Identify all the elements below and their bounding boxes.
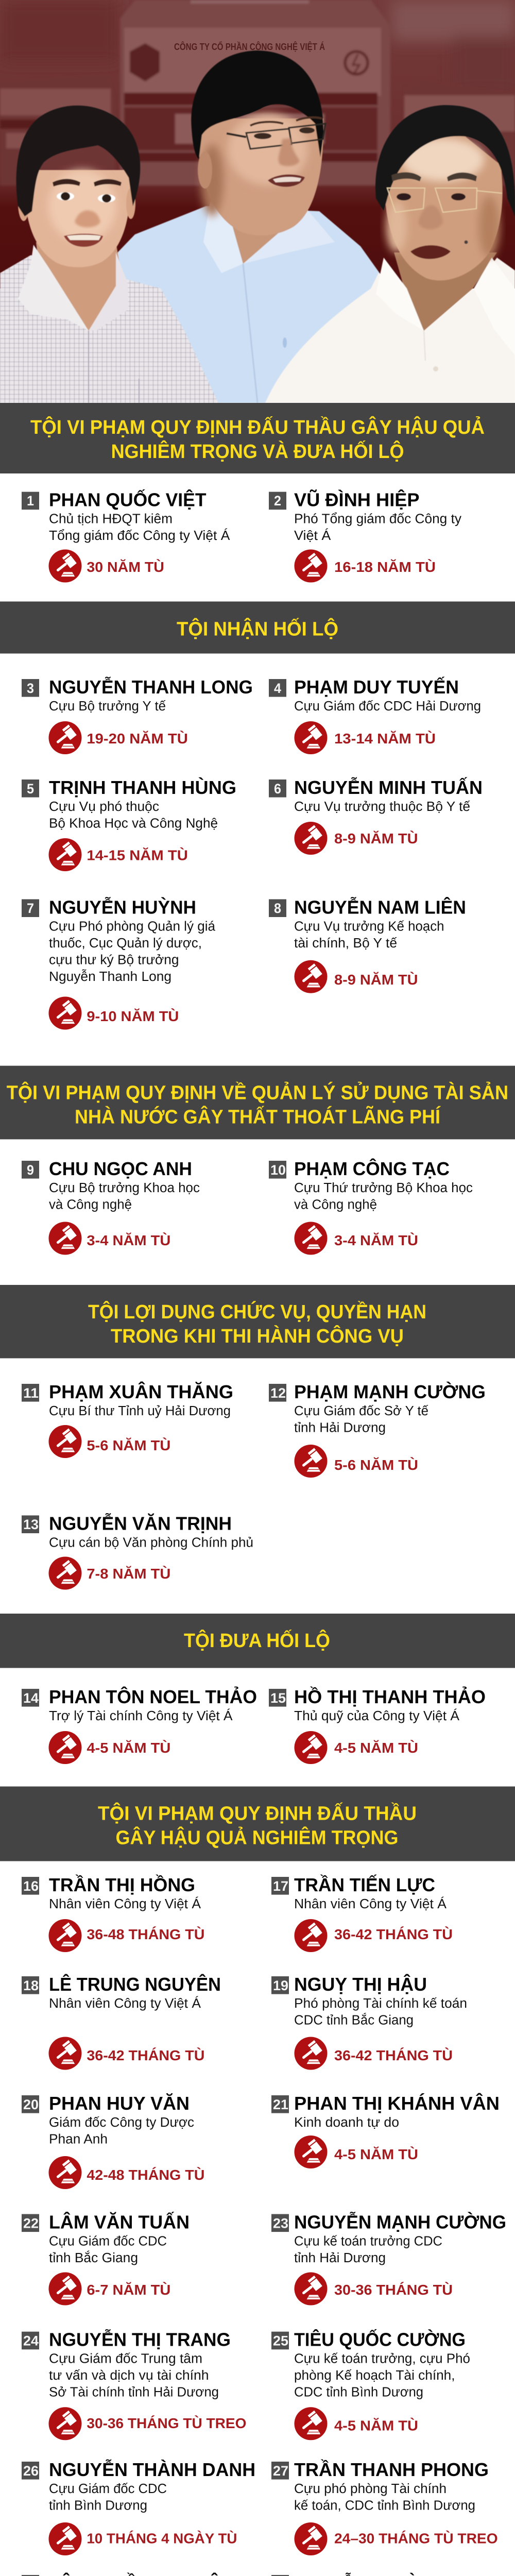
person 4: PHẠM DUY TUYẾN: [294, 676, 459, 698]
person 8: [269, 896, 466, 993]
person 23: 23: [273, 2215, 288, 2231]
person 22: Cựu Giám đốc CDC: [49, 2234, 167, 2248]
person 17: TRẦN TIẾN LỰC: [294, 1874, 435, 1895]
person 10: và Công nghệ: [294, 1197, 377, 1212]
person 8: 8-9 NĂM TÙ: [334, 972, 418, 988]
person 15: 4-5 NĂM TÙ: [334, 1740, 418, 1756]
person 21: Kinh doanh tự do: [294, 2115, 399, 2130]
person 6: NGUYỄN MINH TUẤN: [294, 776, 483, 798]
person 27: 27: [273, 2463, 288, 2479]
person 13: [22, 1512, 253, 1590]
person 20: 20: [23, 2097, 39, 2112]
person 5: [22, 776, 236, 871]
person 19: [271, 1973, 467, 2070]
person 4: 4: [274, 681, 281, 696]
person 10: 3-4 NĂM TÙ: [334, 1232, 418, 1248]
person 15: Thủ quỹ của Công ty Việt Á: [294, 1708, 459, 1723]
person 14: 4-5 NĂM TÙ: [87, 1740, 170, 1756]
band: bid violation and bribery heading: TỘI VI PHẠM QUY ĐỊNH ĐẤU THẦU GÂY HẬU QUẢ: [30, 415, 485, 438]
person 19: 19: [273, 1978, 288, 1993]
band: bid violation serious consequences heading: [0, 1787, 515, 1861]
person 19: 36-42 THÁNG TÙ: [334, 2047, 453, 2063]
person 27: [271, 2459, 498, 2555]
person 20: Phan Anh: [49, 2132, 108, 2146]
person 22: LÂM VĂN TUẤN: [49, 2211, 190, 2233]
person 15: [269, 1686, 486, 1764]
person 20: [22, 2093, 204, 2189]
person 14: 14: [23, 1690, 39, 1706]
band: abuse of position heading: TỘI LỢI DỤNG CHỨC VỤ, QUYỀN HẠN: [88, 1300, 426, 1323]
person 5: Bộ Khoa Học và Công Nghệ: [49, 816, 218, 831]
person 8: 8: [274, 901, 281, 916]
person 4: [269, 676, 481, 754]
person 16: Nhân viên Công ty Việt Á: [49, 1896, 201, 1911]
person 21: 4-5 NĂM TÙ: [334, 2146, 418, 2162]
person 14: PHAN TÔN NOEL THẢO: [49, 1686, 257, 1707]
header photo: three defendants over Viet A test kit boxes: [0, 0, 515, 403]
person 11: 5-6 NĂM TÙ: [87, 1437, 170, 1453]
person 6: Cựu Vụ trưởng thuộc Bộ Y tế: [294, 800, 470, 814]
person 18: 36-42 THÁNG TÙ: [87, 2047, 204, 2063]
person 18: Nhân viên Công ty Việt Á: [49, 1996, 201, 2011]
band: bid violation and bribery heading: NGHIÊM TRỌNG VÀ ĐƯA HỐI LỘ: [111, 439, 404, 463]
person 13: NGUYỄN VĂN TRỊNH: [49, 1512, 232, 1534]
person 25: Cựu kế toán trưởng, cựu Phó: [294, 2352, 470, 2366]
person 27: Cựu phó phòng Tài chính: [294, 2482, 447, 2496]
person 7: NGUYỄN HUỲNH: [49, 896, 196, 918]
person 5: 5: [27, 781, 34, 796]
person 18: LÊ TRUNG NGUYÊN: [49, 1973, 221, 1995]
person 11: Cựu Bí thư Tỉnh uỷ Hải Dương: [49, 1404, 231, 1418]
person 15: 15: [270, 1690, 286, 1706]
person 1: 1: [27, 493, 34, 509]
person 27: 24–30 THÁNG TÙ TREO: [334, 2531, 498, 2546]
person 17: 36-42 THÁNG TÙ: [334, 1926, 453, 1942]
box label text: CÔNG TY CỔ PHẦN CÔNG NGHỆ VIỆT Á: [174, 41, 325, 52]
person 26: 10 THÁNG 4 NGÀY TÙ: [87, 2531, 237, 2546]
person 10: Cựu Thứ trưởng Bộ Khoa học: [294, 1181, 473, 1195]
person 3: Cựu Bộ trưởng Y tế: [49, 699, 166, 714]
person 7: 7: [27, 901, 34, 916]
person 26: tỉnh Bình Dương: [49, 2499, 147, 2513]
person 24: NGUYỄN THỊ TRANG: [49, 2329, 231, 2350]
person 3: [22, 676, 253, 754]
person 13: Cựu cán bộ Văn phòng Chính phủ: [49, 1535, 253, 1550]
band: bid violation and bribery heading: [0, 403, 515, 473]
person 12: Cựu Giám đốc Sở Y tế: [294, 1404, 428, 1418]
person: centre, light blue shirt: [110, 50, 392, 403]
person 4: Cựu Giám đốc CDC Hải Dương: [294, 699, 481, 714]
person 12: [269, 1381, 486, 1478]
person 1: Chủ tịch HĐQT kiêm: [49, 512, 173, 527]
person 8: NGUYỄN NAM LIÊN: [294, 896, 466, 918]
person 24: 24: [23, 2333, 39, 2349]
band: state asset management heading: [0, 1066, 515, 1139]
person 18: 18: [23, 1978, 39, 1993]
person 10: PHẠM CÔNG TẠC: [294, 1158, 450, 1179]
band: abuse of position heading: [0, 1285, 515, 1358]
person 16: 36-48 THÁNG TÙ: [87, 1926, 204, 1942]
person 7: thuốc, Cục Quản lý dược,: [49, 936, 202, 951]
person 21: 21: [273, 2097, 288, 2112]
person 20: 42-48 THÁNG TÙ: [87, 2167, 204, 2183]
person 1: Tổng giám đốc Công ty Việt Á: [49, 528, 230, 543]
person 23: 30-36 THÁNG TÙ: [334, 2282, 453, 2298]
person 6: 8-9 NĂM TÙ: [334, 831, 418, 846]
person 2: Việt Á: [294, 528, 331, 543]
person 16: 16: [23, 1878, 39, 1894]
person 19: Phó phòng Tài chính kế toán: [294, 1996, 467, 2011]
person 12: PHẠM MẠNH CƯỜNG: [294, 1381, 486, 1402]
person 7: Nguyễn Thanh Long: [49, 969, 171, 984]
person 17: 17: [273, 1878, 288, 1894]
person 20: PHAN HUY VĂN: [49, 2093, 190, 2114]
person 7: 9-10 NĂM TÙ: [87, 1008, 179, 1024]
person 25: phòng Kế hoạch Tài chính,: [294, 2368, 455, 2383]
person 26: [22, 2459, 255, 2555]
person 25: [271, 2329, 470, 2440]
person 9: 9: [27, 1162, 34, 1178]
person 23: tỉnh Hải Dương: [294, 2251, 386, 2265]
person 2: 16-18 NĂM TÙ: [334, 559, 436, 575]
person 13: 7-8 NĂM TÙ: [87, 1566, 170, 1582]
person 25: CDC tỉnh Bình Dương: [294, 2385, 423, 2400]
person 5: Cựu Vụ phó thuộc: [49, 800, 159, 814]
person 27: TRẦN THANH PHONG: [294, 2459, 489, 2480]
person 23: [271, 2211, 506, 2306]
person 5: TRỊNH THANH HÙNG: [49, 776, 236, 798]
band: bribe taking heading: TỘI NHẬN HỐI LỘ: [177, 617, 338, 640]
person 17: [271, 1874, 453, 1952]
band: abuse of position heading: TRONG KHI THI HÀNH CÔNG VỤ: [111, 1324, 404, 1347]
person 10: 10: [270, 1162, 286, 1178]
person 3: 3: [27, 681, 34, 696]
person 27: kế toán, CDC tỉnh Bình Dương: [294, 2499, 475, 2513]
person 5: 14-15 NĂM TÙ: [87, 847, 188, 863]
person 12: 5-6 NĂM TÙ: [334, 1457, 418, 1473]
person 3: 19-20 NĂM TÙ: [87, 731, 188, 747]
person 9: CHU NGỌC ANH: [49, 1158, 192, 1179]
person 15: HỒ THỊ THANH THẢO: [294, 1686, 486, 1707]
person 9: 3-4 NĂM TÙ: [87, 1232, 170, 1248]
person 2: [269, 489, 461, 583]
person 26: NGUYỄN THÀNH DANH: [49, 2459, 255, 2480]
person 1: 30 NĂM TÙ: [87, 559, 164, 575]
person 6: [269, 776, 483, 855]
person: left, checked shirt: [0, 106, 218, 403]
person 22: [22, 2211, 190, 2306]
photo background: kit boxes tinted red: [0, 0, 515, 289]
person 26: Cựu Giám đốc CDC: [49, 2482, 167, 2496]
person 23: NGUYỄN MẠNH CƯỜNG: [294, 2211, 506, 2233]
person 22: 22: [23, 2215, 39, 2231]
person 16: [22, 1874, 204, 1952]
person 7: Cựu Phó phòng Quản lý giá: [49, 919, 216, 934]
person 22: 6-7 NĂM TÙ: [87, 2282, 170, 2298]
person 24: [22, 2329, 246, 2440]
band: bribe giving heading: [0, 1614, 515, 1668]
person 8: Cựu Vụ trưởng Kế hoạch: [294, 919, 444, 934]
person 13: 13: [23, 1517, 39, 1532]
person 6: 6: [274, 781, 281, 796]
person 12: 12: [270, 1385, 286, 1401]
person 19: NGUỴ THỊ HẬU: [294, 1973, 427, 1995]
person 24: Cựu Giám đốc Trung tâm: [49, 2352, 202, 2366]
band: bid violation serious consequences heading: TỘI VI PHẠM QUY ĐỊNH ĐẤU THẦU: [98, 1801, 417, 1825]
person 12: tỉnh Hải Dương: [294, 1421, 386, 1435]
person 10: [269, 1158, 473, 1255]
person 11: 11: [23, 1385, 39, 1401]
person 23: Cựu kế toán trưởng CDC: [294, 2234, 442, 2248]
person 9: Cựu Bộ trưởng Khoa học: [49, 1181, 200, 1195]
person 2: 2: [274, 493, 281, 509]
person 2: VŨ ĐÌNH HIỆP: [294, 489, 420, 511]
person 1: [22, 489, 230, 583]
person 24: 30-36 THÁNG TÙ TREO: [87, 2415, 246, 2431]
person 11: PHẠM XUÂN THĂNG: [49, 1381, 233, 1402]
band: state asset management heading: NHÀ NƯỚC GÂY THẤT THOÁT LÃNG PHÍ: [75, 1106, 441, 1128]
person: right, white shirt: [265, 105, 515, 403]
person 20: Giám đốc Công ty Dược: [49, 2115, 194, 2130]
person 2: Phó Tổng giám đốc Công ty: [294, 512, 461, 527]
person 26: 26: [23, 2463, 39, 2479]
person 24: tư vấn và dịch vụ tài chính: [49, 2368, 209, 2383]
person 1: PHAN QUỐC VIỆT: [49, 489, 207, 511]
person 8: tài chính, Bộ Y tế: [294, 936, 397, 951]
band: bid violation serious consequences heading: GÂY HẬU QUẢ NGHIÊM TRỌNG: [115, 1826, 399, 1849]
person 9: và Công nghệ: [49, 1197, 132, 1212]
person 14: Trợ lý Tài chính Công ty Việt Á: [49, 1708, 233, 1723]
person 24: Sở Tài chính tỉnh Hải Dương: [49, 2385, 219, 2400]
person 4: 13-14 NĂM TÙ: [334, 731, 436, 747]
person 25: 4-5 NĂM TÙ: [334, 2417, 418, 2434]
person 19: CDC tỉnh Bắc Giang: [294, 2012, 414, 2028]
person 25: 25: [273, 2333, 288, 2349]
person 3: NGUYỄN THANH LONG: [49, 676, 253, 698]
person 25: TIÊU QUỐC CƯỜNG: [294, 2329, 466, 2350]
person 22: tỉnh Bắc Giang: [49, 2250, 138, 2265]
person 21: PHAN THỊ KHÁNH VÂN: [294, 2092, 500, 2114]
person 14: [22, 1686, 257, 1764]
person 16: TRẦN THỊ HỒNG: [49, 1874, 195, 1895]
person 11: [22, 1381, 233, 1458]
person 18: [22, 1973, 221, 2070]
band: bribe giving heading: TỘI ĐƯA HỐI LỘ: [184, 1629, 330, 1652]
band: bribe taking heading: [0, 602, 515, 653]
person 21: [271, 2092, 500, 2168]
person 9: [22, 1158, 200, 1255]
person 7: cựu thư ký Bộ trưởng: [49, 953, 179, 967]
person 7: [22, 896, 216, 1030]
person 17: Nhân viên Công ty Việt Á: [294, 1896, 447, 1911]
